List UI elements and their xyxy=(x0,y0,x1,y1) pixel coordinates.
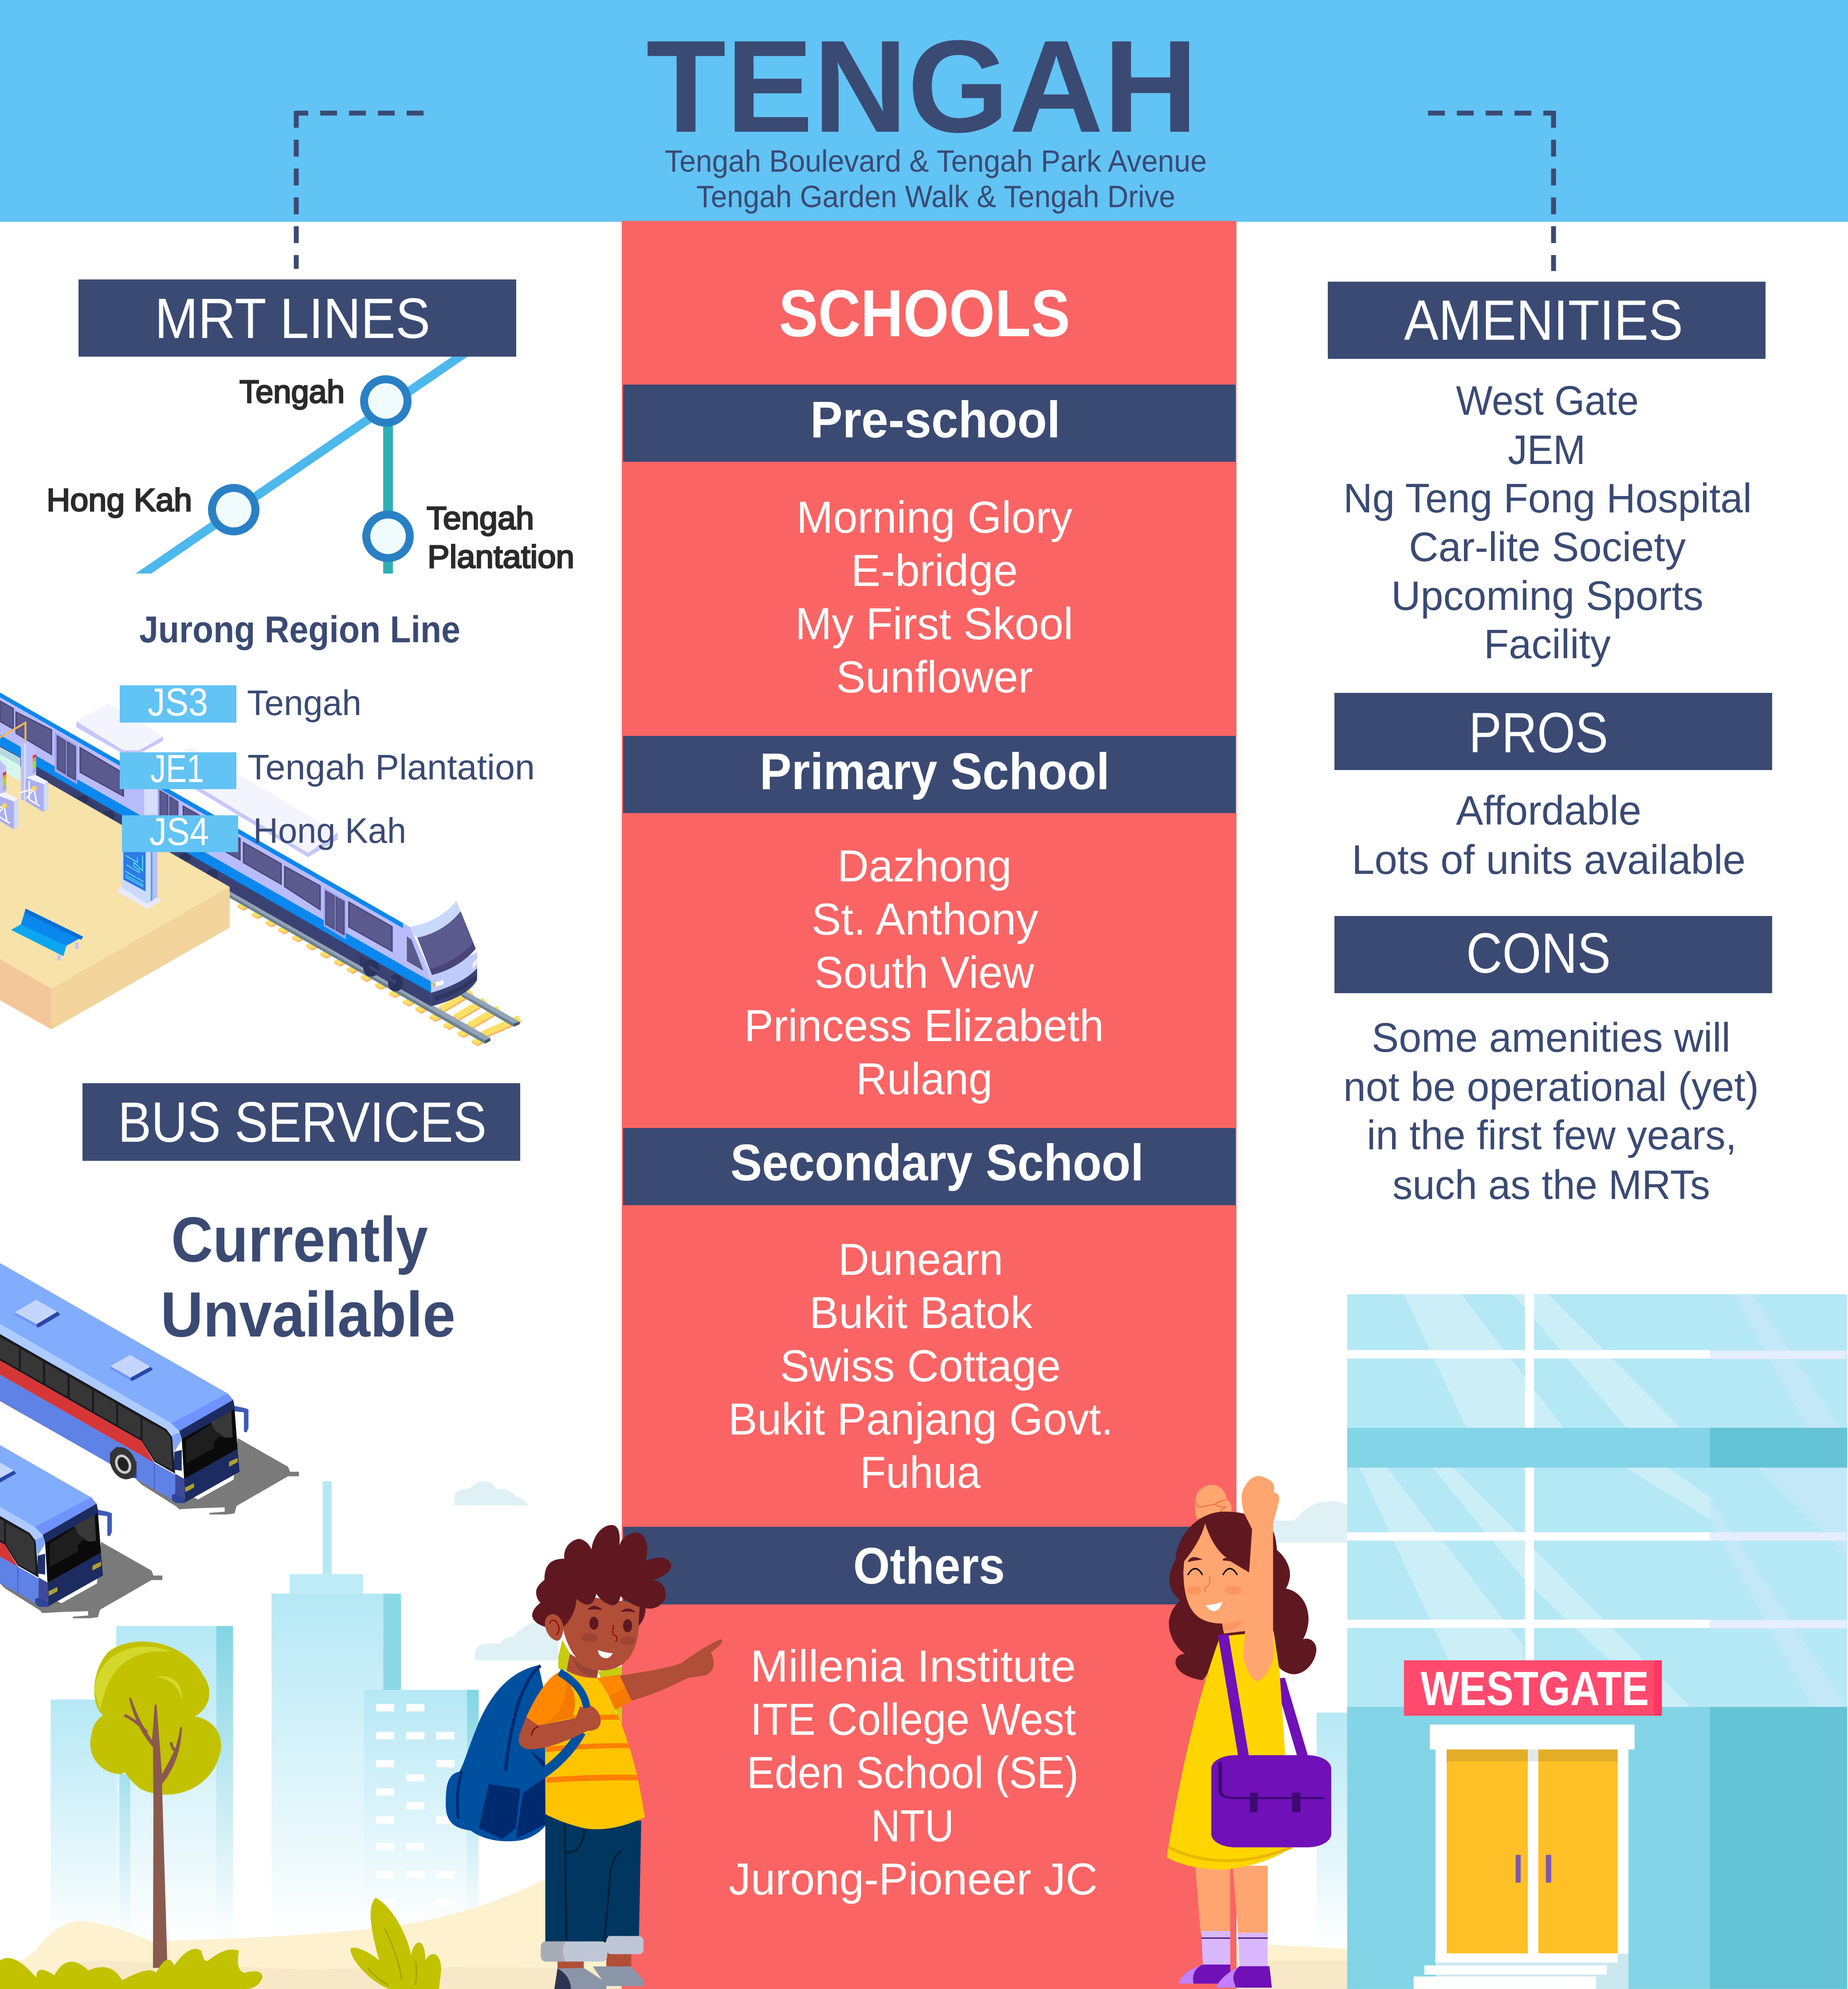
heading: BUS SERVICES: BUS SERVICES xyxy=(118,1091,487,1154)
amenities list xyxy=(1343,377,1752,667)
face xyxy=(562,1595,639,1671)
illustration: Westgate building xyxy=(1347,1294,1847,1989)
station code JS4 xyxy=(122,810,406,853)
cons text: not be operational (yet) xyxy=(1343,1064,1759,1110)
section: others: Millenia Institute xyxy=(750,1642,1076,1691)
heading: MRT LINES xyxy=(78,279,516,357)
subtitle: road names: Tengah Garden Walk & Tengah Drive xyxy=(696,179,1175,214)
amenities list: JEM xyxy=(1508,427,1585,473)
pros list xyxy=(1352,787,1746,883)
panel: cons xyxy=(1334,916,1772,1208)
city skyline left xyxy=(51,1481,558,1945)
illustration: train xyxy=(0,684,520,1046)
driver cab xyxy=(403,923,432,982)
station code JS3: Tengah xyxy=(247,683,361,723)
section: pre-school: Morning Glory xyxy=(796,493,1072,542)
shoulder bag xyxy=(1211,1755,1331,1847)
dashed connector right xyxy=(1428,111,1554,271)
ticket gates xyxy=(0,723,48,829)
section: secondary school: Bukit Panjang Govt. xyxy=(728,1395,1113,1444)
subtitle: road names xyxy=(665,144,1207,214)
heading: CONS: CONS xyxy=(1466,922,1611,985)
illustration: bus two xyxy=(0,1299,162,1618)
bench xyxy=(11,908,83,960)
section: secondary school: Dunearn xyxy=(838,1235,1003,1285)
amenities list: Upcoming Sports xyxy=(1391,573,1703,619)
heading: PROS xyxy=(1334,693,1772,770)
panel: schools xyxy=(622,221,1236,1989)
section: others: ITE College West xyxy=(750,1695,1076,1745)
ear xyxy=(545,1614,563,1641)
amenities list: Ng Teng Fong Hospital xyxy=(1343,475,1752,521)
holding arm xyxy=(519,1706,601,1749)
panel: pros xyxy=(1334,693,1772,883)
pros list: Affordable xyxy=(1456,787,1641,833)
section: others: Others xyxy=(853,1537,1005,1595)
illustration: girl waving xyxy=(1167,1476,1331,1988)
pointing arm xyxy=(620,1639,722,1701)
roof panels xyxy=(76,704,338,857)
heading: SCHOOLS: SCHOOLS xyxy=(779,276,1070,350)
MRT line map: Tengah xyxy=(239,374,345,410)
section: pre-school: E-bridge xyxy=(851,546,1018,596)
illustration: station roofs xyxy=(73,704,338,879)
illustration: boy pointing xyxy=(446,1525,722,1989)
panel: amenities xyxy=(1328,282,1766,667)
station code JS3: JS3 xyxy=(148,680,208,724)
section: primary school: St. Anthony xyxy=(812,895,1038,944)
subtitle: road names: Tengah Boulevard & Tengah Park Avenue xyxy=(665,144,1207,178)
section: others: Jurong-Pioneer JC xyxy=(729,1855,1098,1904)
station code JS3 xyxy=(120,680,361,724)
MRT line map: Hong Kah xyxy=(47,483,192,518)
upper body and head xyxy=(457,1525,722,1829)
section: pre-school: My First Skool xyxy=(795,599,1073,649)
section: secondary school: Bukit Batok xyxy=(809,1288,1032,1338)
city skyline right xyxy=(1270,1502,1349,1948)
station code JS4: Hong Kah xyxy=(253,811,406,850)
section: secondary school xyxy=(623,1128,1236,1498)
station code JE1 xyxy=(120,747,535,790)
cons text: in the first few years, xyxy=(1367,1112,1737,1158)
backpack straps xyxy=(559,1672,587,1709)
heading: MRT LINES: MRT LINES xyxy=(155,287,430,350)
section: others: NTU xyxy=(871,1801,954,1851)
heading: PROS: PROS xyxy=(1469,701,1608,765)
heading: AMENITIES xyxy=(1328,282,1766,359)
header band xyxy=(0,0,1848,222)
section: primary school xyxy=(623,736,1236,1104)
MRT line map xyxy=(47,350,574,581)
section: primary school: Rulang xyxy=(856,1054,993,1104)
subheading: Jurong Region Line: Jurong Region Line xyxy=(139,609,460,650)
cons text: such as the MRTs xyxy=(1393,1162,1710,1208)
dashed connector left xyxy=(296,111,424,269)
section: others: Eden School (SE) xyxy=(747,1748,1079,1798)
amenities list: West Gate xyxy=(1456,377,1639,424)
station equipment xyxy=(0,723,161,909)
bogie and wheels xyxy=(360,955,372,968)
section: secondary school: Swiss Cottage xyxy=(780,1341,1061,1391)
eyes, brows, cheeks, smile xyxy=(589,1617,599,1630)
sign: WESTGATE: WESTGATE xyxy=(1420,1662,1649,1716)
track xyxy=(212,881,520,1046)
text: currently unavailable: Unvailable xyxy=(161,1279,455,1350)
section: primary school: South View xyxy=(814,948,1035,998)
station code JS4: JS4 xyxy=(149,810,209,853)
bushes xyxy=(0,1898,441,1989)
dress, legs and right strap xyxy=(1167,1631,1303,1988)
cons text xyxy=(1343,1014,1759,1208)
section: secondary school: Secondary School xyxy=(730,1134,1144,1191)
heading: AMENITIES: AMENITIES xyxy=(1404,289,1683,352)
station platform xyxy=(0,754,230,1030)
panel: bus services xyxy=(82,1083,520,1350)
lower body and backpack xyxy=(446,1665,643,1989)
fist and hair xyxy=(1169,1485,1316,1680)
section: pre-school: Pre-school xyxy=(810,391,1060,448)
information kiosk xyxy=(118,849,161,909)
panel: MRT lines xyxy=(47,279,574,853)
amenities list: Car-lite Society xyxy=(1409,524,1686,570)
section: primary school: Princess Elizabeth xyxy=(744,1001,1104,1051)
MRT line map: Tengah xyxy=(427,501,534,536)
section: others xyxy=(623,1527,1236,1904)
section: pre-school: Sunflower xyxy=(836,653,1033,702)
neck xyxy=(567,1654,598,1678)
illustration: bus one xyxy=(0,1195,299,1514)
text: currently unavailable xyxy=(161,1204,455,1350)
cons text: Some amenities will xyxy=(1372,1014,1730,1061)
station code JE1: Tengah Plantation xyxy=(247,747,535,787)
head and raised arm xyxy=(1183,1476,1279,1682)
section: pre-school xyxy=(623,385,1236,702)
title: TENGAH xyxy=(646,13,1198,160)
section: secondary school: Fuhua xyxy=(860,1448,981,1498)
heading: CONS xyxy=(1334,916,1772,993)
shirt xyxy=(538,1671,645,1829)
text: currently unavailable: Currently xyxy=(171,1204,428,1275)
station code JE1: JE1 xyxy=(150,747,204,790)
tree xyxy=(90,1642,221,1968)
entrance doors xyxy=(1414,1725,1635,1989)
train bogie left xyxy=(73,791,218,879)
MRT line map: Plantation xyxy=(428,539,574,575)
sand ground xyxy=(0,1863,1357,1989)
amenities list: Facility xyxy=(1484,621,1611,667)
section: primary school: Primary School xyxy=(760,743,1110,800)
train body xyxy=(0,684,477,1006)
pros list: Lots of units available xyxy=(1352,837,1746,883)
hair xyxy=(532,1525,671,1627)
section: primary school: Dazhong xyxy=(837,841,1012,891)
